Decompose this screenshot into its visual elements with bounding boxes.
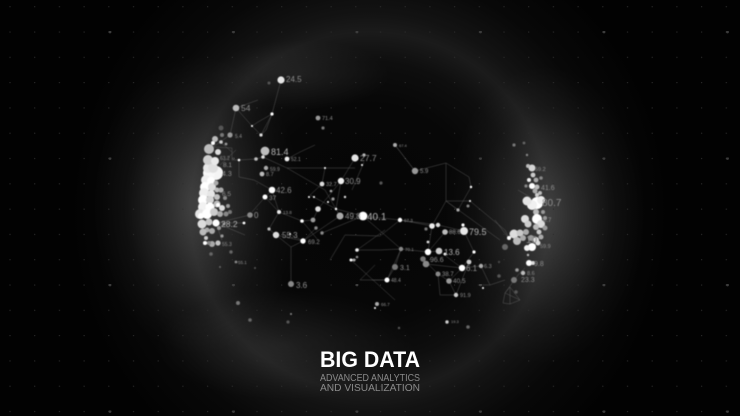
node value labels: 55.3 xyxy=(282,231,298,240)
right particle cluster xyxy=(497,142,548,294)
node value labels: 6.3 xyxy=(484,264,492,270)
node value labels: 10 xyxy=(526,235,538,246)
node value labels: 3.6 xyxy=(296,281,308,290)
node value labels: 91.9 xyxy=(460,293,471,299)
node value labels: 5.4 xyxy=(235,134,242,140)
node value labels: 59.9 xyxy=(270,167,280,173)
node value labels: 40.1 xyxy=(367,212,387,223)
node value labels: 66.7 xyxy=(381,302,390,307)
node value labels: 63.2 xyxy=(220,156,230,162)
node value labels: 28.2 xyxy=(221,219,238,229)
node value labels: 8.7 xyxy=(266,172,274,178)
node value labels: 6.5 xyxy=(222,191,231,198)
node value labels: 59.2 xyxy=(535,167,546,173)
node value labels: 0 xyxy=(254,211,259,220)
node value labels: 8.1 xyxy=(223,162,232,169)
node value labels: 52.1 xyxy=(291,157,301,163)
node value labels: 88.6 xyxy=(449,230,461,236)
node value labels: 8.6 xyxy=(527,271,535,277)
node value labels xyxy=(220,75,562,324)
node value labels: 19.3 xyxy=(451,319,460,324)
node value labels: 30.9 xyxy=(345,177,361,186)
node value labels: 24.5 xyxy=(286,75,302,84)
node value labels: 49.8 xyxy=(345,212,361,221)
node value labels: 32.7 xyxy=(326,182,337,188)
node value labels: 4.3 xyxy=(222,171,232,178)
node value labels: 8.7 xyxy=(543,218,552,224)
node value labels: 37 xyxy=(269,195,277,202)
node value labels: 67.4 xyxy=(399,143,408,148)
node value labels: 67.3 xyxy=(404,218,413,223)
node value labels: 59.9 xyxy=(540,244,551,250)
node value labels: 9.8 xyxy=(534,261,544,268)
node value labels: 80.7 xyxy=(542,198,562,209)
data nodes xyxy=(212,76,500,329)
node value labels: 55.3 xyxy=(222,242,232,248)
node value labels: 38.7 xyxy=(442,272,454,278)
node value labels: 13.8 xyxy=(283,210,292,215)
node value labels: 79.5 xyxy=(469,227,487,237)
subtitle: advanced analytics: ADVANCED ANALYTICS xyxy=(320,372,420,384)
node value labels: 3.1 xyxy=(400,265,410,272)
node value labels: 23.3 xyxy=(521,277,535,284)
node value labels: 42.6 xyxy=(276,186,292,195)
node value labels: 55.1 xyxy=(238,260,247,265)
node value labels: 6.1 xyxy=(466,264,478,273)
node value labels: 5.9 xyxy=(420,169,429,175)
node value labels: 69.2 xyxy=(308,240,320,246)
title: BIG DATA: BIG DATA xyxy=(320,347,420,372)
node value labels: 71.4 xyxy=(322,116,333,122)
node value labels: 13.6 xyxy=(444,248,460,257)
node value labels: 54 xyxy=(241,103,251,113)
node value labels: 27.7 xyxy=(360,153,377,163)
node value labels: 96.6 xyxy=(430,257,444,264)
network connection lines xyxy=(213,80,535,304)
subtitle: and visualization: AND VISUALIZATION xyxy=(320,382,420,394)
node value labels: 40.5 xyxy=(453,278,466,285)
node value labels: 70.1 xyxy=(405,247,414,252)
node value labels: 81.4 xyxy=(271,147,289,157)
left particle cluster xyxy=(195,126,232,256)
node value labels: 41.6 xyxy=(541,185,555,192)
node value labels: 48.4 xyxy=(391,278,401,284)
